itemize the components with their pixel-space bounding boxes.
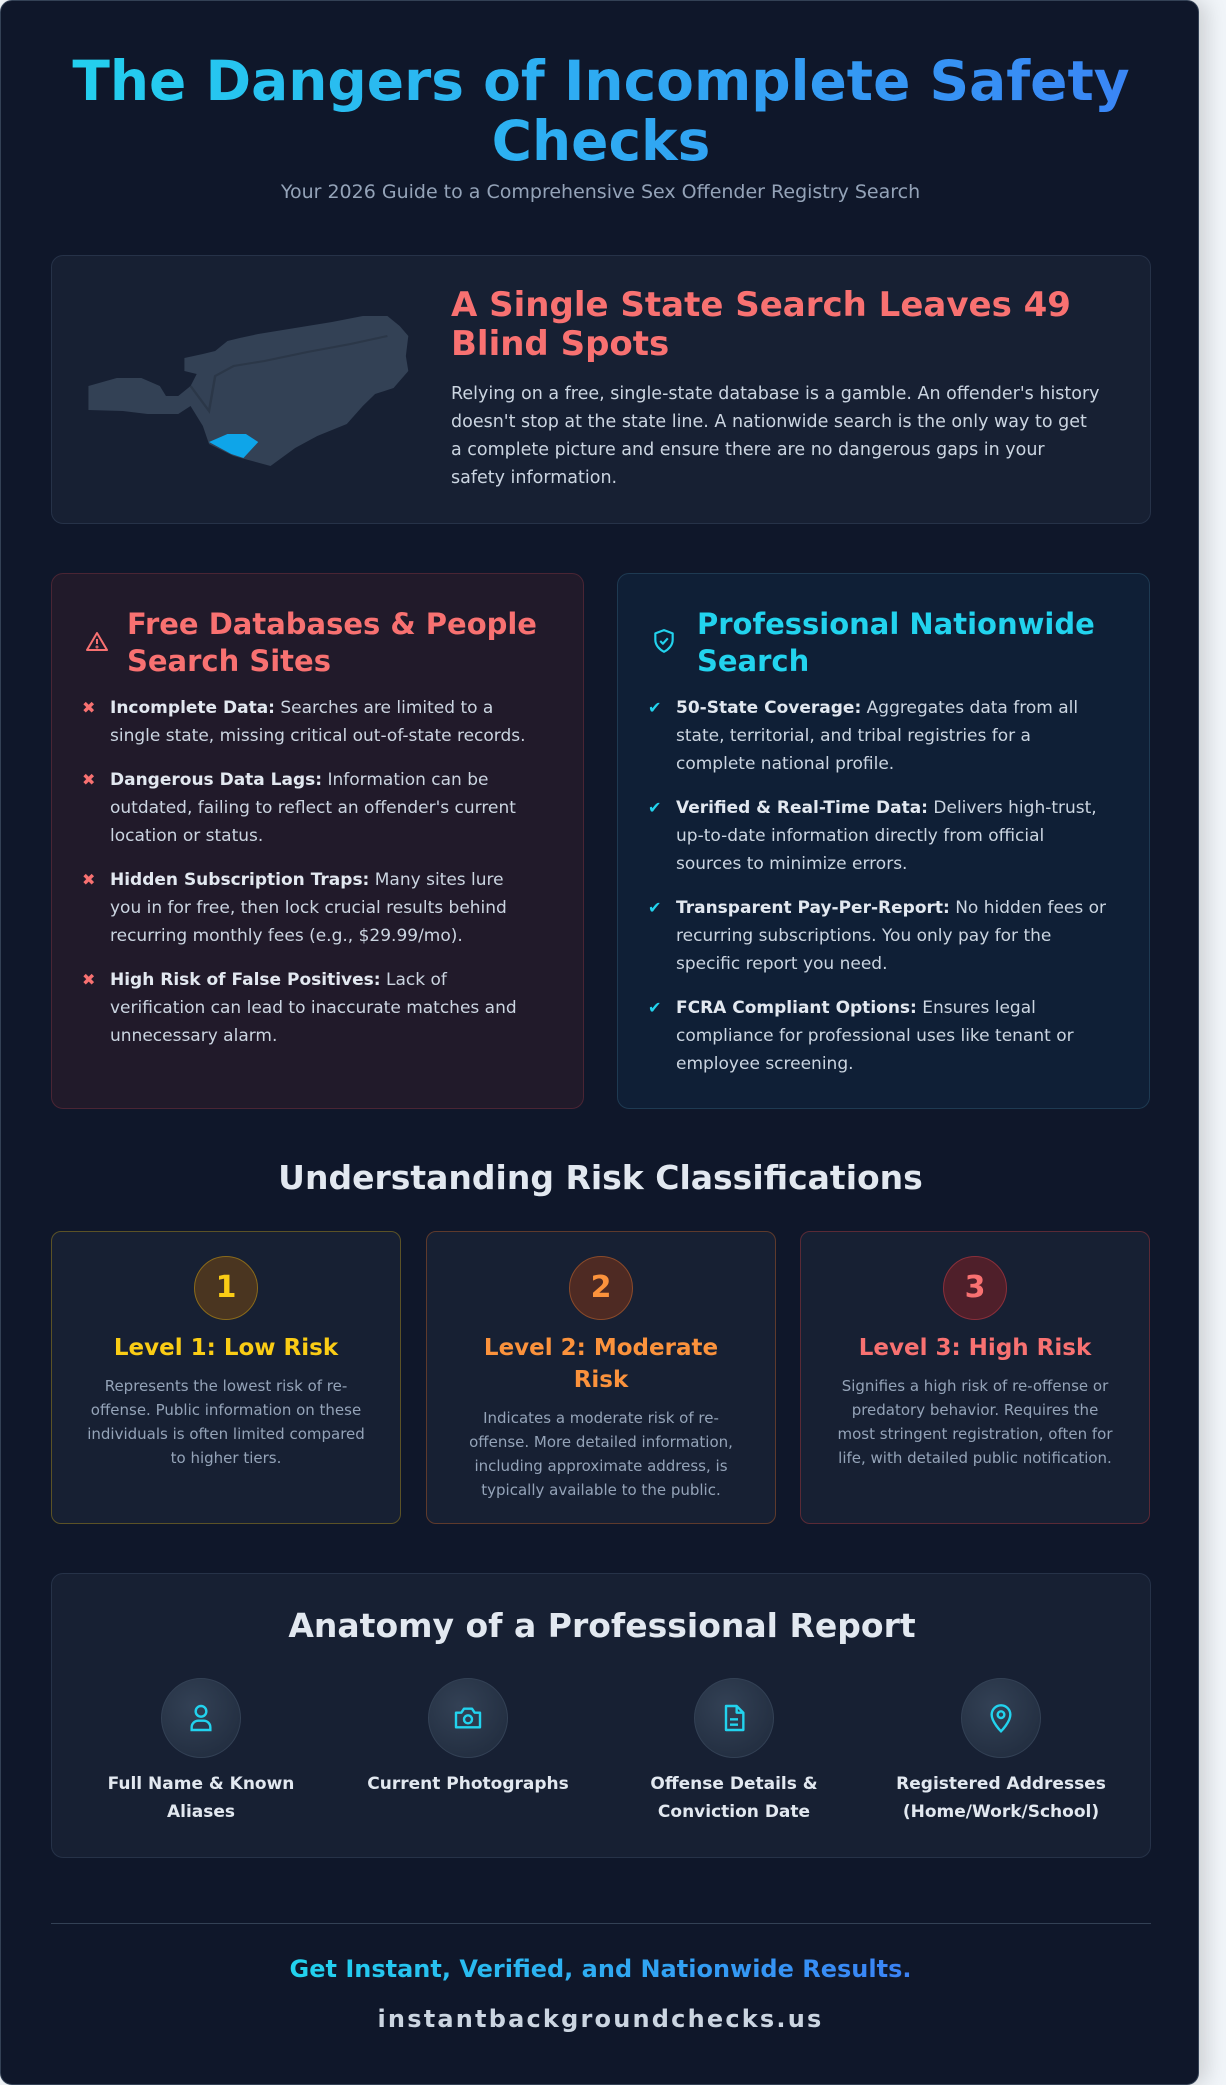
list: Hidden Subscription Traps: Many sites lure you in for free, then lock crucial results behind recurring monthly fees (e.g., $29.99/mo). <box>110 870 507 946</box>
feature: offense: Offense Details & Conviction Date <box>650 1774 818 1822</box>
icon: shield <box>654 629 674 653</box>
list <box>82 698 526 1046</box>
card: level 1: Level 1: Low Risk <box>114 1335 338 1361</box>
body text: Relying on a free, single-state database is a gamble. An offender's history doesn't stop at the state line. A nationwide search is the only way to get a complete picture and ensure there are no dangerous gaps in your safety information. <box>451 384 1100 488</box>
card: level 3 <box>800 1231 1150 1524</box>
list: Verified & Real-Time Data: Delivers high-trust, up-to-date information directly from official sources to minimize errors. <box>676 798 1097 874</box>
heading: Professional Nationwide Search <box>697 607 1095 678</box>
card: level 2 <box>426 1231 776 1524</box>
list: Dangerous Data Lags: Information can be outdated, failing to reflect an offender's current location or status. <box>110 770 516 846</box>
call to action: Get Instant, Verified, and Nationwide Results. <box>290 1955 911 1983</box>
title: The Dangers of Incomplete Safety Checks <box>72 49 1130 173</box>
feature: photos <box>367 1678 569 1794</box>
feature: addresses: Registered Addresses (Home/Work/School) <box>896 1774 1106 1822</box>
list: ✖ <box>82 970 95 989</box>
heading: Anatomy of a Professional Report <box>288 1606 916 1645</box>
card: level 2: Indicates a moderate risk of re-offense. More detailed information, including approximate address, is typically available to the public. <box>469 1409 733 1499</box>
list: Incomplete Data: Searches are limited to a single state, missing critical out-of-state records. <box>110 698 526 746</box>
heading: A Single State Search Leaves 49 Blind Spots <box>451 285 1071 364</box>
list: FCRA Compliant Options: Ensures legal compliance for professional uses like tenant or employee screening. <box>676 998 1074 1074</box>
panel: free databases <box>51 573 584 1109</box>
list: ✔ <box>648 898 661 917</box>
feature: photos: Current Photographs <box>367 1774 569 1794</box>
card: level 2: Level 2: Moderate Risk <box>484 1335 718 1393</box>
feature: addresses <box>896 1678 1106 1822</box>
card: level 1 <box>51 1231 401 1524</box>
list: ✔ <box>648 698 661 717</box>
feature: offense <box>650 1678 818 1822</box>
subtitle: Your 2026 Guide to a Comprehensive Sex Offender Registry Search <box>281 181 920 203</box>
feature: name: Full Name & Known Aliases <box>108 1774 294 1822</box>
card: level 1: 1 <box>216 1270 236 1305</box>
icon: warning <box>86 632 108 651</box>
list: 50-State Coverage: Aggregates data from all state, territorial, and tribal registries for a complete national profile. <box>676 698 1078 774</box>
card: level 3: Signifies a high risk of re-offense or predatory behavior. Requires the most stringent registration, often for life, with detailed public notification. <box>838 1377 1112 1467</box>
heading: risk classifications: Understanding Risk Classifications <box>278 1158 923 1197</box>
map illustration <box>88 316 408 466</box>
card: level 1: Represents the lowest risk of re-offense. Public information on these individuals is often limited compared to higher tiers. <box>87 1377 365 1467</box>
list: ✔ <box>648 998 661 1017</box>
list: Transparent Pay-Per-Report: No hidden fees or recurring subscriptions. You only pay for the specific report you need. <box>676 898 1106 974</box>
list <box>648 698 1106 1074</box>
card: level 3: Level 3: High Risk <box>859 1335 1091 1361</box>
heading: Free Databases & People Search Sites <box>127 607 537 678</box>
feature: name <box>108 1678 294 1822</box>
card: level 2: 2 <box>591 1270 611 1305</box>
list: ✖ <box>82 698 95 717</box>
list: ✖ <box>82 770 95 789</box>
list: ✔ <box>648 798 661 817</box>
panel: single state <box>51 255 1151 524</box>
panel: anatomy <box>51 1573 1151 1858</box>
card: level 3: 3 <box>965 1270 985 1305</box>
list: ✖ <box>82 870 95 889</box>
list: High Risk of False Positives: Lack of verification can lead to inaccurate matches and unnecessary alarm. <box>110 970 517 1046</box>
panel: professional search <box>617 573 1150 1109</box>
website url: instantbackgroundchecks.us <box>378 2005 824 2033</box>
